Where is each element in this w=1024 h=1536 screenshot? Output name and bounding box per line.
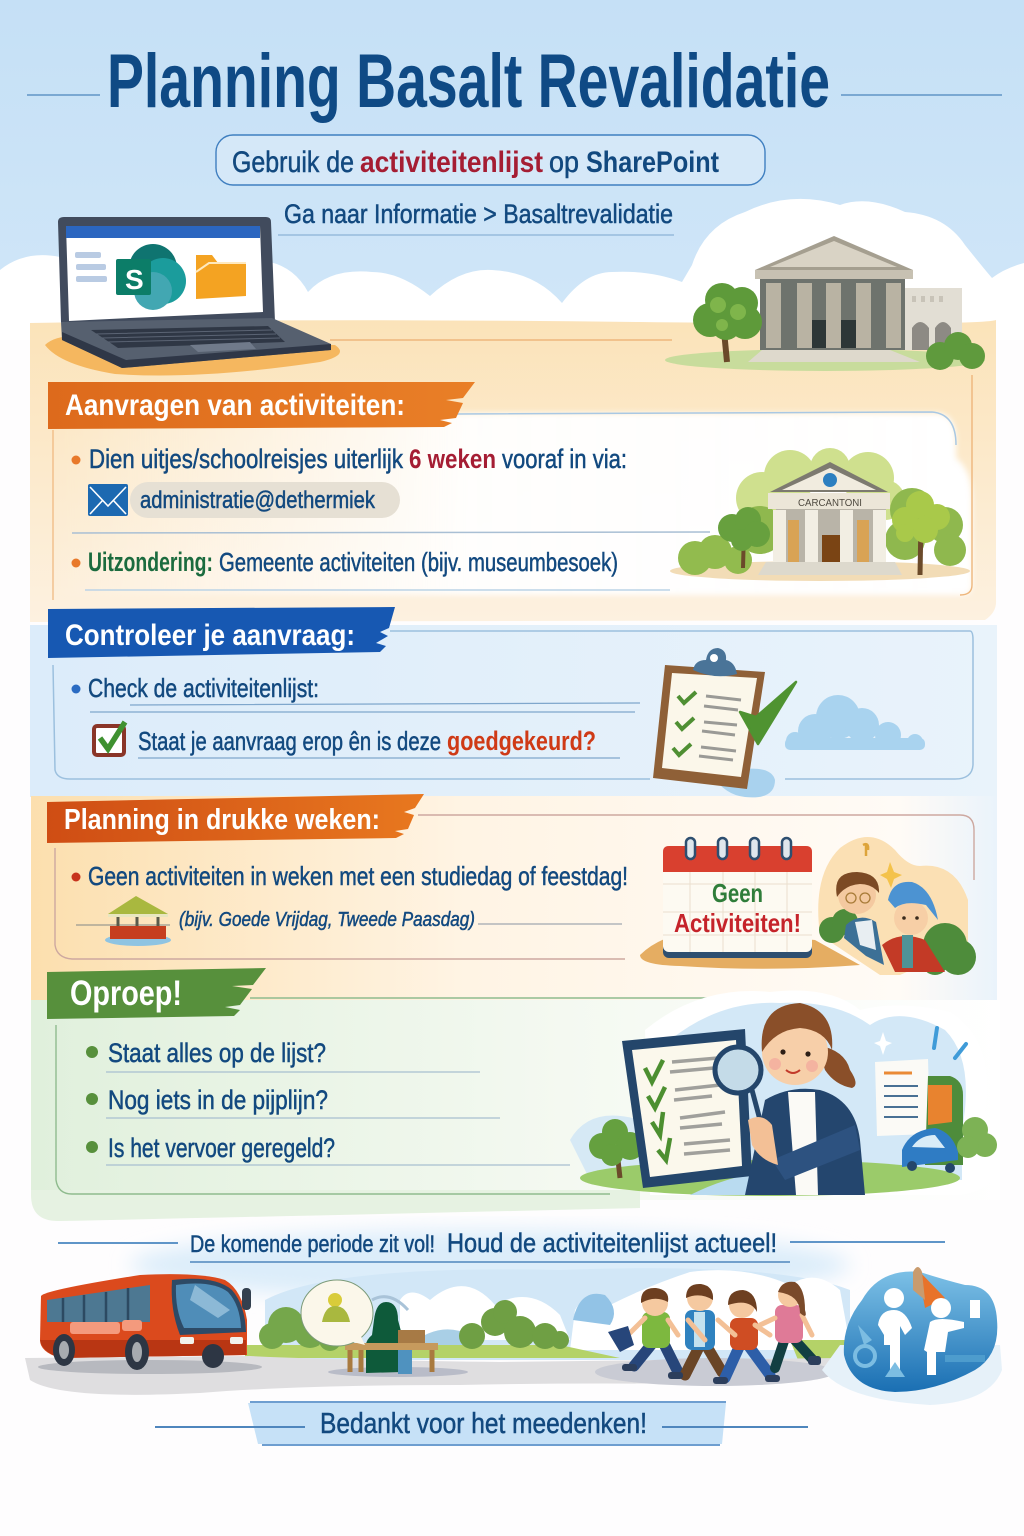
text: aanvragen bullet 1 [72, 444, 627, 474]
subtitle pill [216, 135, 765, 185]
banner: bedankt: Bedankt voor het meedenken! [320, 1408, 647, 1440]
illustration: woman with magnifier [570, 990, 1000, 1196]
footer tagline [58, 1228, 945, 1300]
banner: planning: Planning in drukke weken: [64, 804, 380, 836]
icon: calendar: Geen [712, 878, 763, 908]
email pill: administratie@dethermiek [140, 487, 376, 514]
icon: calendar: Activiteiten! [674, 908, 801, 938]
text: geen activiteiten: Geen activiteiten in weken met een studiedag of feestdag! [88, 861, 628, 891]
text: aanvragen bullet 2 [72, 547, 618, 577]
banner: oproep [47, 968, 266, 1019]
icon: checkbox [94, 722, 125, 755]
icon: kids illustration [818, 837, 976, 975]
icon: clipboard with check [653, 648, 796, 797]
text: voorbeeld feestdagen: (bijv. Goede Vrijdag, Tweede Paasdag) [179, 909, 475, 931]
text: aanvragen bullet 2: Gemeente activiteiten (bijv. museumbesoek) [219, 547, 618, 577]
subtitle pill: activiteitenlijst [360, 146, 543, 179]
panel: oproep bottom corner [31, 1190, 640, 1221]
text: staat je aanvraag: Staat je aanvraag erop ên is deze [138, 726, 441, 756]
panel: planning outline [55, 815, 974, 959]
text: aanvragen bullet 2: Uitzondering: [88, 547, 213, 577]
banner: planning [47, 794, 424, 843]
street scene [25, 1268, 850, 1395]
footer tagline: De komende periode zit vol! [190, 1231, 435, 1258]
panel: controleer outline [53, 631, 973, 779]
list: oproep questions: Nog iets in de pijplijn? [108, 1085, 328, 1115]
text: aanvragen bullet 1: 6 weken [409, 444, 496, 474]
subtitle pill: op [549, 146, 579, 179]
list: oproep questions: Staat alles op de lijst? [108, 1038, 326, 1068]
icon: main building [665, 236, 985, 371]
panel: planning background [31, 796, 997, 1002]
text: check de lijst: Check de activiteitenlijst: [88, 673, 319, 703]
laptop illustration [45, 217, 340, 376]
navigation path: Ga naar Informatie > Basaltrevalidatie [284, 199, 673, 229]
email pill [130, 482, 400, 518]
list: oproep questions: Is het vervoer geregeld? [108, 1133, 335, 1163]
text: aanvragen bullet 1: Dien uitjes/schoolreisjes uiterlijk [89, 444, 403, 474]
footer tagline: Houd de activiteitenlijst actueel! [447, 1228, 777, 1258]
banner: controleer: Controleer je aanvraag: [65, 619, 355, 652]
icon: envelope [88, 484, 128, 516]
panel: aanvragen inner card [55, 413, 972, 595]
list: oproep questions [86, 1038, 570, 1165]
title rules [27, 94, 1002, 96]
banner: bedankt [155, 1402, 808, 1445]
subtitle pill: Gebruik de [232, 146, 354, 179]
clouds [0, 199, 1024, 340]
icon: walking children [595, 1282, 835, 1386]
icon: museum with trees: CARCANTONI [798, 498, 862, 509]
banner: aanvragen [48, 382, 475, 429]
panel: oproep background [31, 1000, 1000, 1209]
icon: cloud [785, 695, 925, 750]
icon: red bus [38, 1274, 262, 1374]
icon: person at table [301, 1280, 468, 1377]
panel: aanvragen outline [53, 340, 972, 600]
banner: controleer [48, 607, 395, 658]
text: aanvragen bullet 1: vooraf in via: [502, 444, 627, 474]
icon: museum with trees [670, 448, 970, 581]
banner: aanvragen: Aanvragen van activiteiten: [65, 389, 405, 422]
text: staat je aanvraag: goedgekeurd? [447, 726, 596, 756]
icon: calendar [640, 838, 860, 969]
panel: aanvragen background [30, 320, 996, 622]
icon: gazebo [76, 896, 171, 946]
banner: oproep: Oproep! [70, 974, 182, 1013]
icon: accessibility blob with megaphone [822, 1267, 1002, 1405]
panel: oproep outline [56, 998, 710, 1194]
subtitle pill: SharePoint [586, 146, 719, 179]
laptop illustration: S [125, 264, 144, 295]
panel: controleer background [30, 625, 997, 797]
